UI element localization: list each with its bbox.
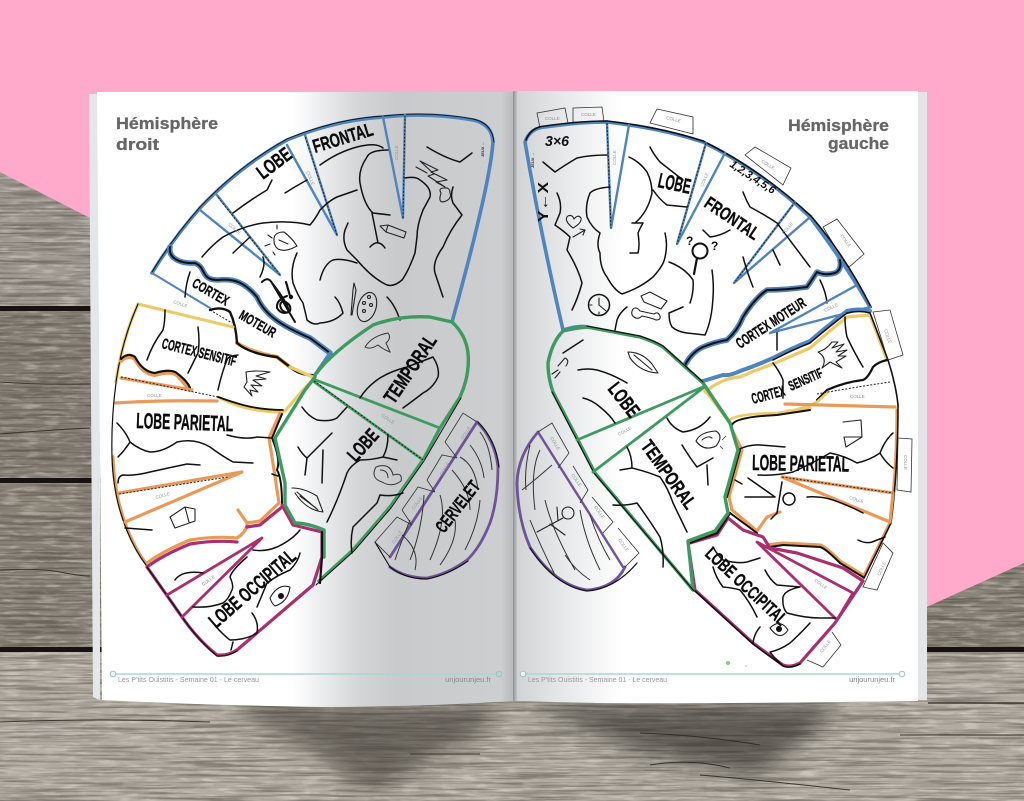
lobe pariétal (gauche) <box>727 404 908 578</box>
glue tab text: COLLE <box>581 112 596 117</box>
small label: jeux: JEUX → <box>530 152 535 168</box>
icon: magnifying glass <box>686 234 718 274</box>
glue tab text: COLLE <box>612 150 617 165</box>
glue tab text: COLLE <box>699 172 709 187</box>
glue tab text: COLLE <box>305 170 316 186</box>
icon: clock <box>588 294 610 316</box>
right page <box>513 91 918 703</box>
small label: jeux: JEUX ← <box>480 141 485 157</box>
label: TEMPORAL: TEMPORAL <box>380 331 442 408</box>
icon: hand <box>244 371 270 396</box>
glue tab text: COLLE <box>819 639 832 654</box>
glue tab text: COLLE <box>781 221 794 236</box>
label: CORTEX SENSITIF: CORTEX SENSITIF <box>160 335 238 370</box>
glue tab text: COLLE <box>391 530 403 545</box>
glue tab text: COLLE <box>593 505 606 520</box>
icon: ear <box>374 466 401 485</box>
glue tabs <box>537 107 912 667</box>
icon: lips <box>628 352 658 373</box>
icon: tooth/nose <box>365 333 390 352</box>
book <box>89 91 927 707</box>
glue tab text: COLLE <box>380 413 395 425</box>
glue tab text: COLLE <box>394 145 399 160</box>
heading: Hémisphère droit: Hémisphère <box>116 114 218 133</box>
label: CORTEX: CORTEX <box>750 383 787 408</box>
label: TEMPORAL: TEMPORAL <box>636 437 700 514</box>
label: LOBE PARIETAL: LOBE PARIETAL <box>752 450 849 477</box>
glue tab text: COLLE <box>155 491 170 500</box>
icon: lips <box>292 488 323 512</box>
icon: nose <box>552 358 568 378</box>
glue tab text: COLLE <box>460 425 472 441</box>
icon: lightning and cloud <box>416 161 450 202</box>
footer: right page: Les P'tits Ouistitis - Semaine 01 - Le cerveau <box>528 675 667 684</box>
icon: scale and bone <box>632 292 667 320</box>
label: Y←X: Y←X <box>535 182 552 222</box>
cortex sensitif (gauche) <box>705 313 898 425</box>
glue tab text: COLLE <box>813 578 828 590</box>
lobe temporal (gauche) <box>548 326 738 591</box>
glue tab text: COLLE <box>549 436 561 451</box>
glue tab text: COLLE <box>617 538 630 553</box>
left page <box>97 92 513 707</box>
heading line: droit: droit <box>116 135 159 154</box>
cortex moteur (droit) <box>152 272 330 375</box>
label: FRONTAL: FRONTAL <box>310 119 376 158</box>
footer: left page <box>110 671 502 684</box>
label: LOBE: LOBE <box>603 379 644 422</box>
lobe frontal (gauche) <box>525 112 871 365</box>
lobe temporal (droit) <box>275 317 468 585</box>
label: MOTEUR: MOTEUR <box>236 307 279 341</box>
glue tab text: COLLE <box>147 393 162 398</box>
label: LOBE: LOBE <box>343 425 384 466</box>
glue tab text: COLLE <box>173 299 188 309</box>
glue tab text: COLLE <box>760 159 776 171</box>
label: LOBE: LOBE <box>253 144 296 184</box>
icon: cube <box>843 420 862 447</box>
cortex moteur (gauche) <box>685 285 870 383</box>
glue tab text: COLLE <box>883 329 893 344</box>
figure body <box>537 507 565 535</box>
glue tab text: COLLE <box>823 302 839 313</box>
heading line: gauche: gauche <box>828 134 889 153</box>
footer: left page: unjourunjeu.fr <box>445 675 491 684</box>
icon: stick figure <box>562 507 574 519</box>
icon: magnifying glass: ? <box>711 239 718 253</box>
footer: right page <box>520 671 905 684</box>
label: LOBE OCCIPITAL: LOBE OCCIPITAL <box>205 545 301 633</box>
label: FRONTAL: FRONTAL <box>701 193 763 244</box>
glue tab text: COLLE <box>849 495 864 504</box>
icon: heart and arrow <box>566 215 585 237</box>
shadow under the book <box>225 704 840 790</box>
icon: magnifying glass: ? <box>686 234 693 248</box>
lobe occipital (droit) <box>147 505 322 656</box>
right hemisphere <box>517 107 912 667</box>
icon: hand <box>818 342 847 368</box>
label: CERVELET: CERVELET <box>431 477 484 536</box>
icon: pencil <box>380 225 406 238</box>
cervelet (droit) <box>375 413 499 579</box>
background: pink shape <box>0 0 1024 610</box>
icon: treble clef and note <box>262 279 295 322</box>
glue tab text: COLLE <box>439 461 451 477</box>
lobe frontal (droit) <box>152 114 494 353</box>
icon: ear <box>696 431 726 449</box>
glue tab text: COLLE <box>570 473 583 488</box>
icon: stick figure <box>735 478 795 519</box>
cortex sensitif (droit) <box>116 304 315 412</box>
glue tab text: COLLE <box>666 115 681 124</box>
footer: right page: unjourunjeu.fr <box>849 675 895 684</box>
cervelet (gauche) <box>517 423 639 591</box>
glue tab text: COLLE <box>227 222 242 235</box>
label: LOBE PARIETAL: LOBE PARIETAL <box>136 408 234 436</box>
label: LOBE: LOBE <box>656 169 693 199</box>
icon: eye <box>270 586 290 606</box>
icon: cube <box>170 507 195 528</box>
label: 1,2,3,4,5,6: 1,2,3,4,5,6 <box>727 158 778 197</box>
label: 3×6: 3×6 <box>545 133 570 150</box>
label: CORTEX: CORTEX <box>190 275 233 309</box>
label: SENSITIF: SENSITIF <box>786 364 825 394</box>
lobe occipital (gauche) <box>688 513 863 667</box>
glue tab text: COLLE <box>617 425 632 437</box>
left hemisphere <box>112 114 499 656</box>
lobe pariétal (droit) <box>112 383 282 565</box>
heading: Hémisphère gauche: Hémisphère <box>788 116 889 135</box>
label: LOBE OCCIPITAL: LOBE OCCIPITAL <box>701 543 792 630</box>
label: CORTEX MOTEUR: CORTEX MOTEUR <box>733 294 809 352</box>
glue tab text: COLLE <box>876 561 887 576</box>
glue tab text: COLLE <box>411 496 423 511</box>
footer: left page: Les P'tits Ouistitis - Semaine 01 - Le cerveau <box>118 675 259 684</box>
icon: light bulb <box>265 225 297 255</box>
glue tab text: COLLE <box>545 116 560 121</box>
icon: brush and palette <box>351 283 380 324</box>
glue tab text: COLLE <box>201 574 216 587</box>
decorative green dots <box>726 661 747 667</box>
glue tab text: COLLE <box>850 394 865 399</box>
page stack edges <box>89 94 100 700</box>
glue tab text: COLLE <box>903 455 908 470</box>
icon: eye <box>770 623 788 636</box>
glue tab text: COLLE <box>839 234 852 248</box>
